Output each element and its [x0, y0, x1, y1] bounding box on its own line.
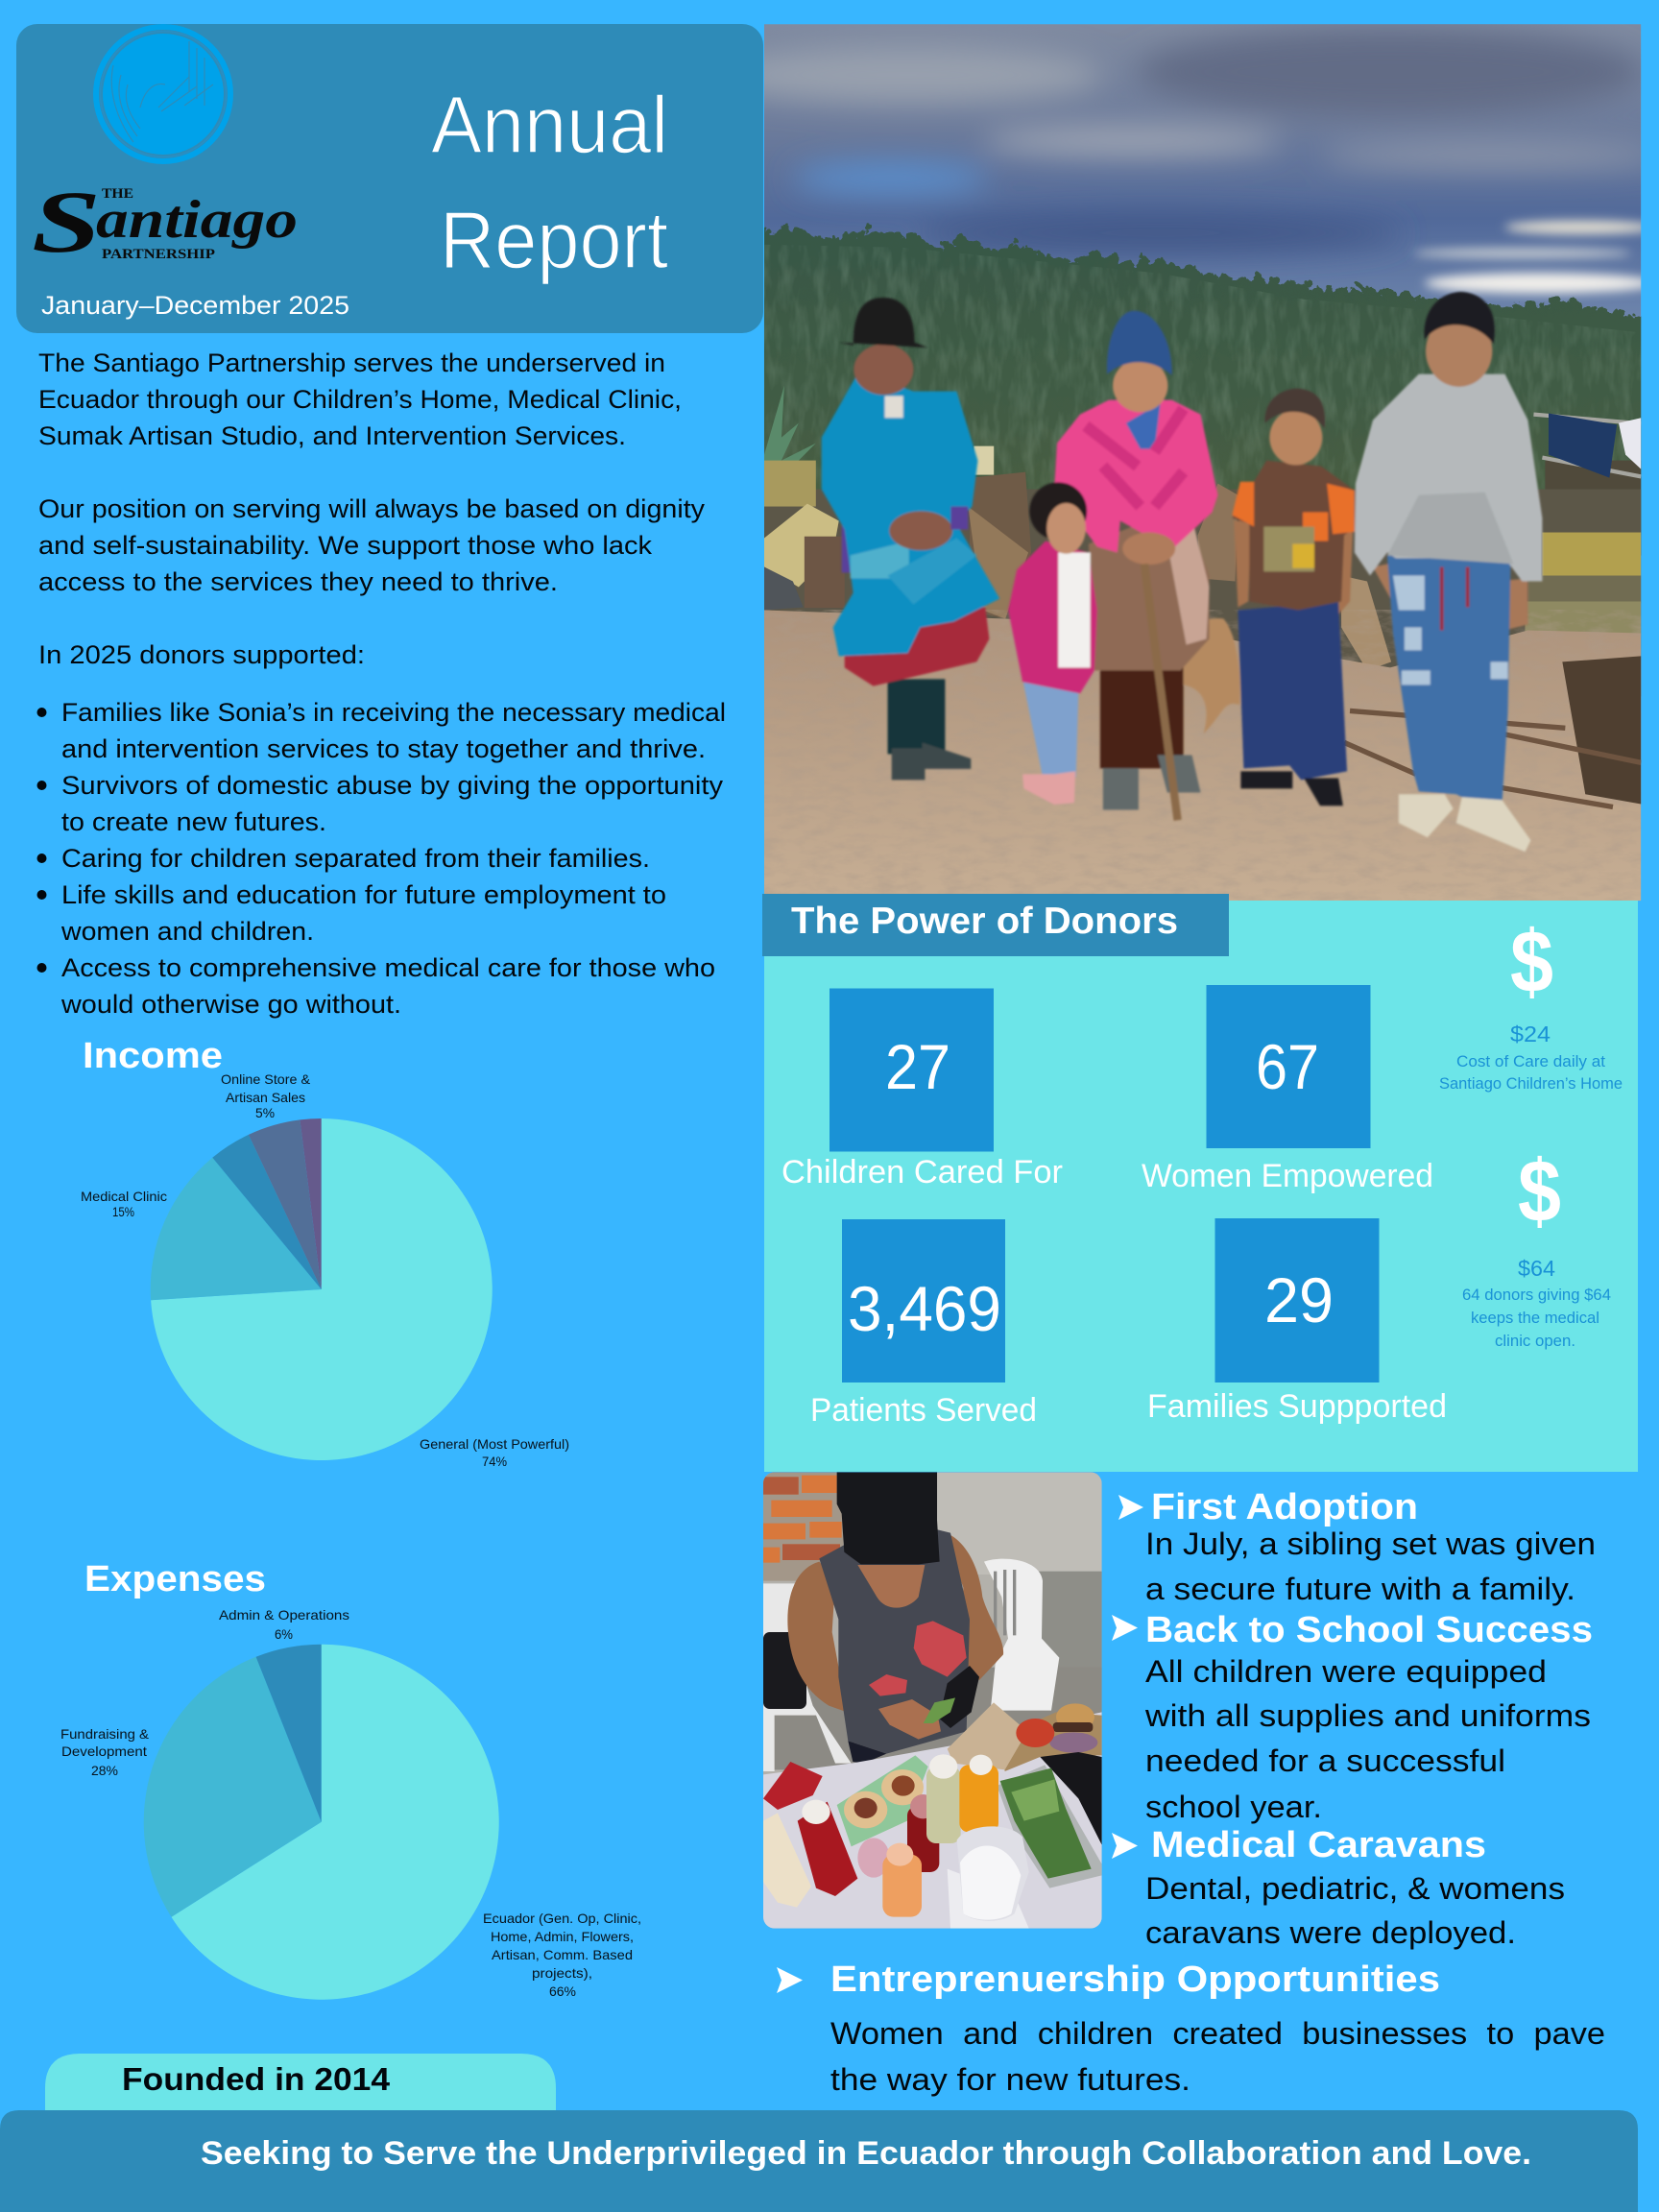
list item: back to school success: with all supplies and uniforms — [1144, 1698, 1591, 1733]
list item: entrepreneurship opportunities: the way for new futures. — [830, 2062, 1190, 2097]
pie chart: expenses: Development — [61, 1743, 147, 1759]
pie chart: expenses: Artisan, Comm. Based — [492, 1947, 633, 1962]
text block: introduction: In 2025 donors supported: — [38, 640, 365, 669]
title — [431, 80, 668, 285]
badge: founded in 2014: Founded in 2014 — [122, 2061, 391, 2097]
bulleted list: donor support: Caring for children separated from their families. — [61, 844, 650, 873]
icon: hand in circle logo — [96, 27, 230, 161]
pie chart: income: 15% — [112, 1204, 134, 1219]
plastic chairs — [984, 1559, 1059, 1711]
pie chart: income: Medical Clinic — [81, 1189, 167, 1204]
arrow — [777, 1967, 803, 1993]
person — [787, 1472, 1003, 1764]
list item: entrepreneurship opportunities: Entreprenuership Opportunities — [830, 1960, 1440, 2000]
list item: back to school success: needed for a successful — [1145, 1743, 1505, 1778]
callout: medical clinic donors: $64 — [1518, 1256, 1555, 1281]
heading: income: Income — [83, 1036, 223, 1076]
date range: January–December 2025 — [41, 291, 349, 320]
panel: header — [16, 24, 763, 333]
list item: first adoption: a secure future with a family. — [1145, 1572, 1575, 1606]
table — [763, 1712, 1102, 1929]
callout: medical clinic donors: $ — [1518, 1142, 1561, 1240]
text block: introduction: Sumak Artisan Studio, and Intervention Services. — [38, 421, 626, 450]
logo wordmark — [32, 173, 298, 271]
bulleted list: donor support: Families like Sonia’s in receiving the necessary medical — [61, 698, 726, 727]
arrow — [1112, 1833, 1138, 1859]
banner heading — [762, 894, 1229, 956]
stat: women empowered — [1142, 985, 1433, 1194]
list item: medical caravans: caravans were deployed. — [1145, 1915, 1516, 1950]
list item: first adoption: First Adoption — [1151, 1487, 1418, 1527]
stat: children cared for: 27 — [885, 1031, 950, 1102]
list item: medical caravans — [1112, 1825, 1565, 1950]
list item: medical caravans: Medical Caravans — [1151, 1825, 1486, 1865]
panel: the power of donors — [762, 894, 1638, 1472]
text block: introduction: Ecuador through our Children’s Home, Medical Clinic, — [38, 385, 682, 414]
bulleted list: donor support: Survivors of domestic abuse by giving the opportunity — [61, 771, 724, 800]
girl in magenta jacket — [1022, 679, 1079, 777]
pie chart: income: General (Most Powerful) — [420, 1436, 569, 1452]
text block: introduction: access to the services they need to thrive. — [38, 567, 558, 596]
badge: founded in 2014 — [45, 2054, 556, 2110]
list item: back to school success: All children were equipped — [1145, 1654, 1547, 1689]
boy in brown shirt — [1234, 521, 1353, 615]
clothesline — [1533, 415, 1641, 476]
callout: daily cost of care — [1439, 913, 1623, 1093]
pie chart: expenses: 6% — [275, 1626, 293, 1642]
callout: daily cost of care: Cost of Care daily at — [1456, 1052, 1605, 1070]
stat: families supported: Families Suppported — [1147, 1388, 1447, 1425]
pie chart: income: Artisan Sales — [226, 1090, 305, 1105]
stat: children cared for: Children Cared For — [781, 1154, 1063, 1190]
bulleted list: donor support — [36, 698, 726, 1019]
food and condiments — [763, 1702, 1102, 1929]
arrow — [1112, 1615, 1138, 1641]
heading: expenses: Expenses — [84, 1559, 266, 1599]
pie chart: income: 5% — [255, 1105, 275, 1120]
logo wordmark: THE — [102, 186, 133, 202]
logo wordmark: PARTNERSHIP — [102, 247, 215, 262]
logo wordmark: antiago — [96, 190, 298, 250]
text block: introduction — [38, 349, 706, 669]
bulleted list: donor support: and intervention services to stay together and thrive. — [61, 734, 706, 763]
callout: daily cost of care: Santiago Children’s Home — [1439, 1074, 1623, 1093]
list item: medical caravans: Dental, pediatric, & womens — [1145, 1871, 1565, 1906]
pie chart: expenses: 66% — [549, 1984, 576, 1999]
callout: daily cost of care: $ — [1510, 913, 1553, 1011]
pie chart: expenses: Fundraising & — [60, 1726, 150, 1742]
list item: entrepreneurship opportunities — [777, 1960, 1605, 2097]
list item: back to school success: Back to School Success — [1145, 1610, 1593, 1650]
text block: introduction: and self-sustainability. We support those who lack — [38, 531, 653, 560]
logo wordmark: S — [32, 173, 101, 271]
callout: medical clinic donors: 64 donors giving $64 — [1462, 1286, 1611, 1304]
arrow — [1118, 1495, 1143, 1520]
forest — [747, 225, 1659, 553]
list item: back to school success: school year. — [1145, 1790, 1322, 1824]
woman in hat and blue shawl — [888, 679, 945, 754]
pie chart: expenses — [60, 1607, 641, 2000]
title: Annual — [431, 80, 668, 170]
bulleted list: donor support: women and children. — [60, 917, 314, 946]
banner heading: The Power of Donors — [791, 901, 1178, 942]
woman in pink cardigan — [1100, 661, 1184, 768]
footer band — [0, 2110, 1638, 2212]
stat: children cared for — [781, 989, 1063, 1190]
pie chart: income — [81, 1071, 569, 1469]
stat: women empowered: 67 — [1256, 1031, 1319, 1102]
stat: patients served: Patients Served — [810, 1392, 1037, 1429]
bulleted list: donor support: Life skills and education for future employment to — [61, 880, 666, 909]
bulleted list: donor support: to create new futures. — [61, 807, 326, 836]
pie chart: expenses: Ecuador (Gen. Op, Clinic, — [483, 1911, 641, 1926]
list item: entrepreneurship opportunities: Women and children created businesses to pave — [830, 2016, 1605, 2051]
brick wall — [763, 1472, 843, 1581]
pie chart: expenses: Home, Admin, Flowers, — [491, 1929, 634, 1944]
callout: medical clinic donors — [1462, 1142, 1611, 1350]
callout: medical clinic donors: keeps the medical — [1471, 1309, 1599, 1327]
list item: first adoption — [1118, 1487, 1596, 1606]
stat: women empowered: Women Empowered — [1142, 1158, 1433, 1194]
dog — [1135, 618, 1240, 733]
mid-ground — [764, 490, 1641, 696]
photo: family standing outdoors — [712, 24, 1659, 901]
callout: daily cost of care: $24 — [1510, 1022, 1551, 1046]
bulleted list: donor support: would otherwise go without. — [60, 990, 401, 1019]
pie chart: expenses: 28% — [91, 1763, 118, 1778]
list item: first adoption: In July, a sibling set was given — [1145, 1527, 1596, 1561]
text block: introduction: Our position on serving will always be based on dignity — [38, 494, 706, 523]
list item: back to school success — [1112, 1610, 1593, 1824]
pie chart: income: Online Store & — [221, 1071, 311, 1087]
callout: medical clinic donors: clinic open. — [1495, 1332, 1575, 1350]
ground — [764, 610, 1641, 901]
teen in grey hoodie — [1373, 562, 1527, 630]
bulleted list: donor support: Access to comprehensive medical care for those who — [61, 953, 715, 982]
footer band: Seeking to Serve the Underprivileged in Ecuador through Collaboration and Love. — [201, 2135, 1531, 2172]
pie chart: expenses: projects), — [532, 1965, 592, 1981]
text block: introduction: The Santiago Partnership serves the underserved in — [38, 349, 665, 377]
stat: families supported — [1147, 1218, 1447, 1425]
stat: patients served — [810, 1219, 1037, 1429]
pie chart: expenses: Admin & Operations — [219, 1607, 349, 1623]
pie chart: income: 74% — [482, 1454, 507, 1469]
stat: families supported: 29 — [1264, 1264, 1334, 1335]
stat: patients served: 3,469 — [848, 1273, 1001, 1344]
title: Report — [440, 195, 668, 285]
photo: woman preparing food — [763, 1472, 1102, 1929]
